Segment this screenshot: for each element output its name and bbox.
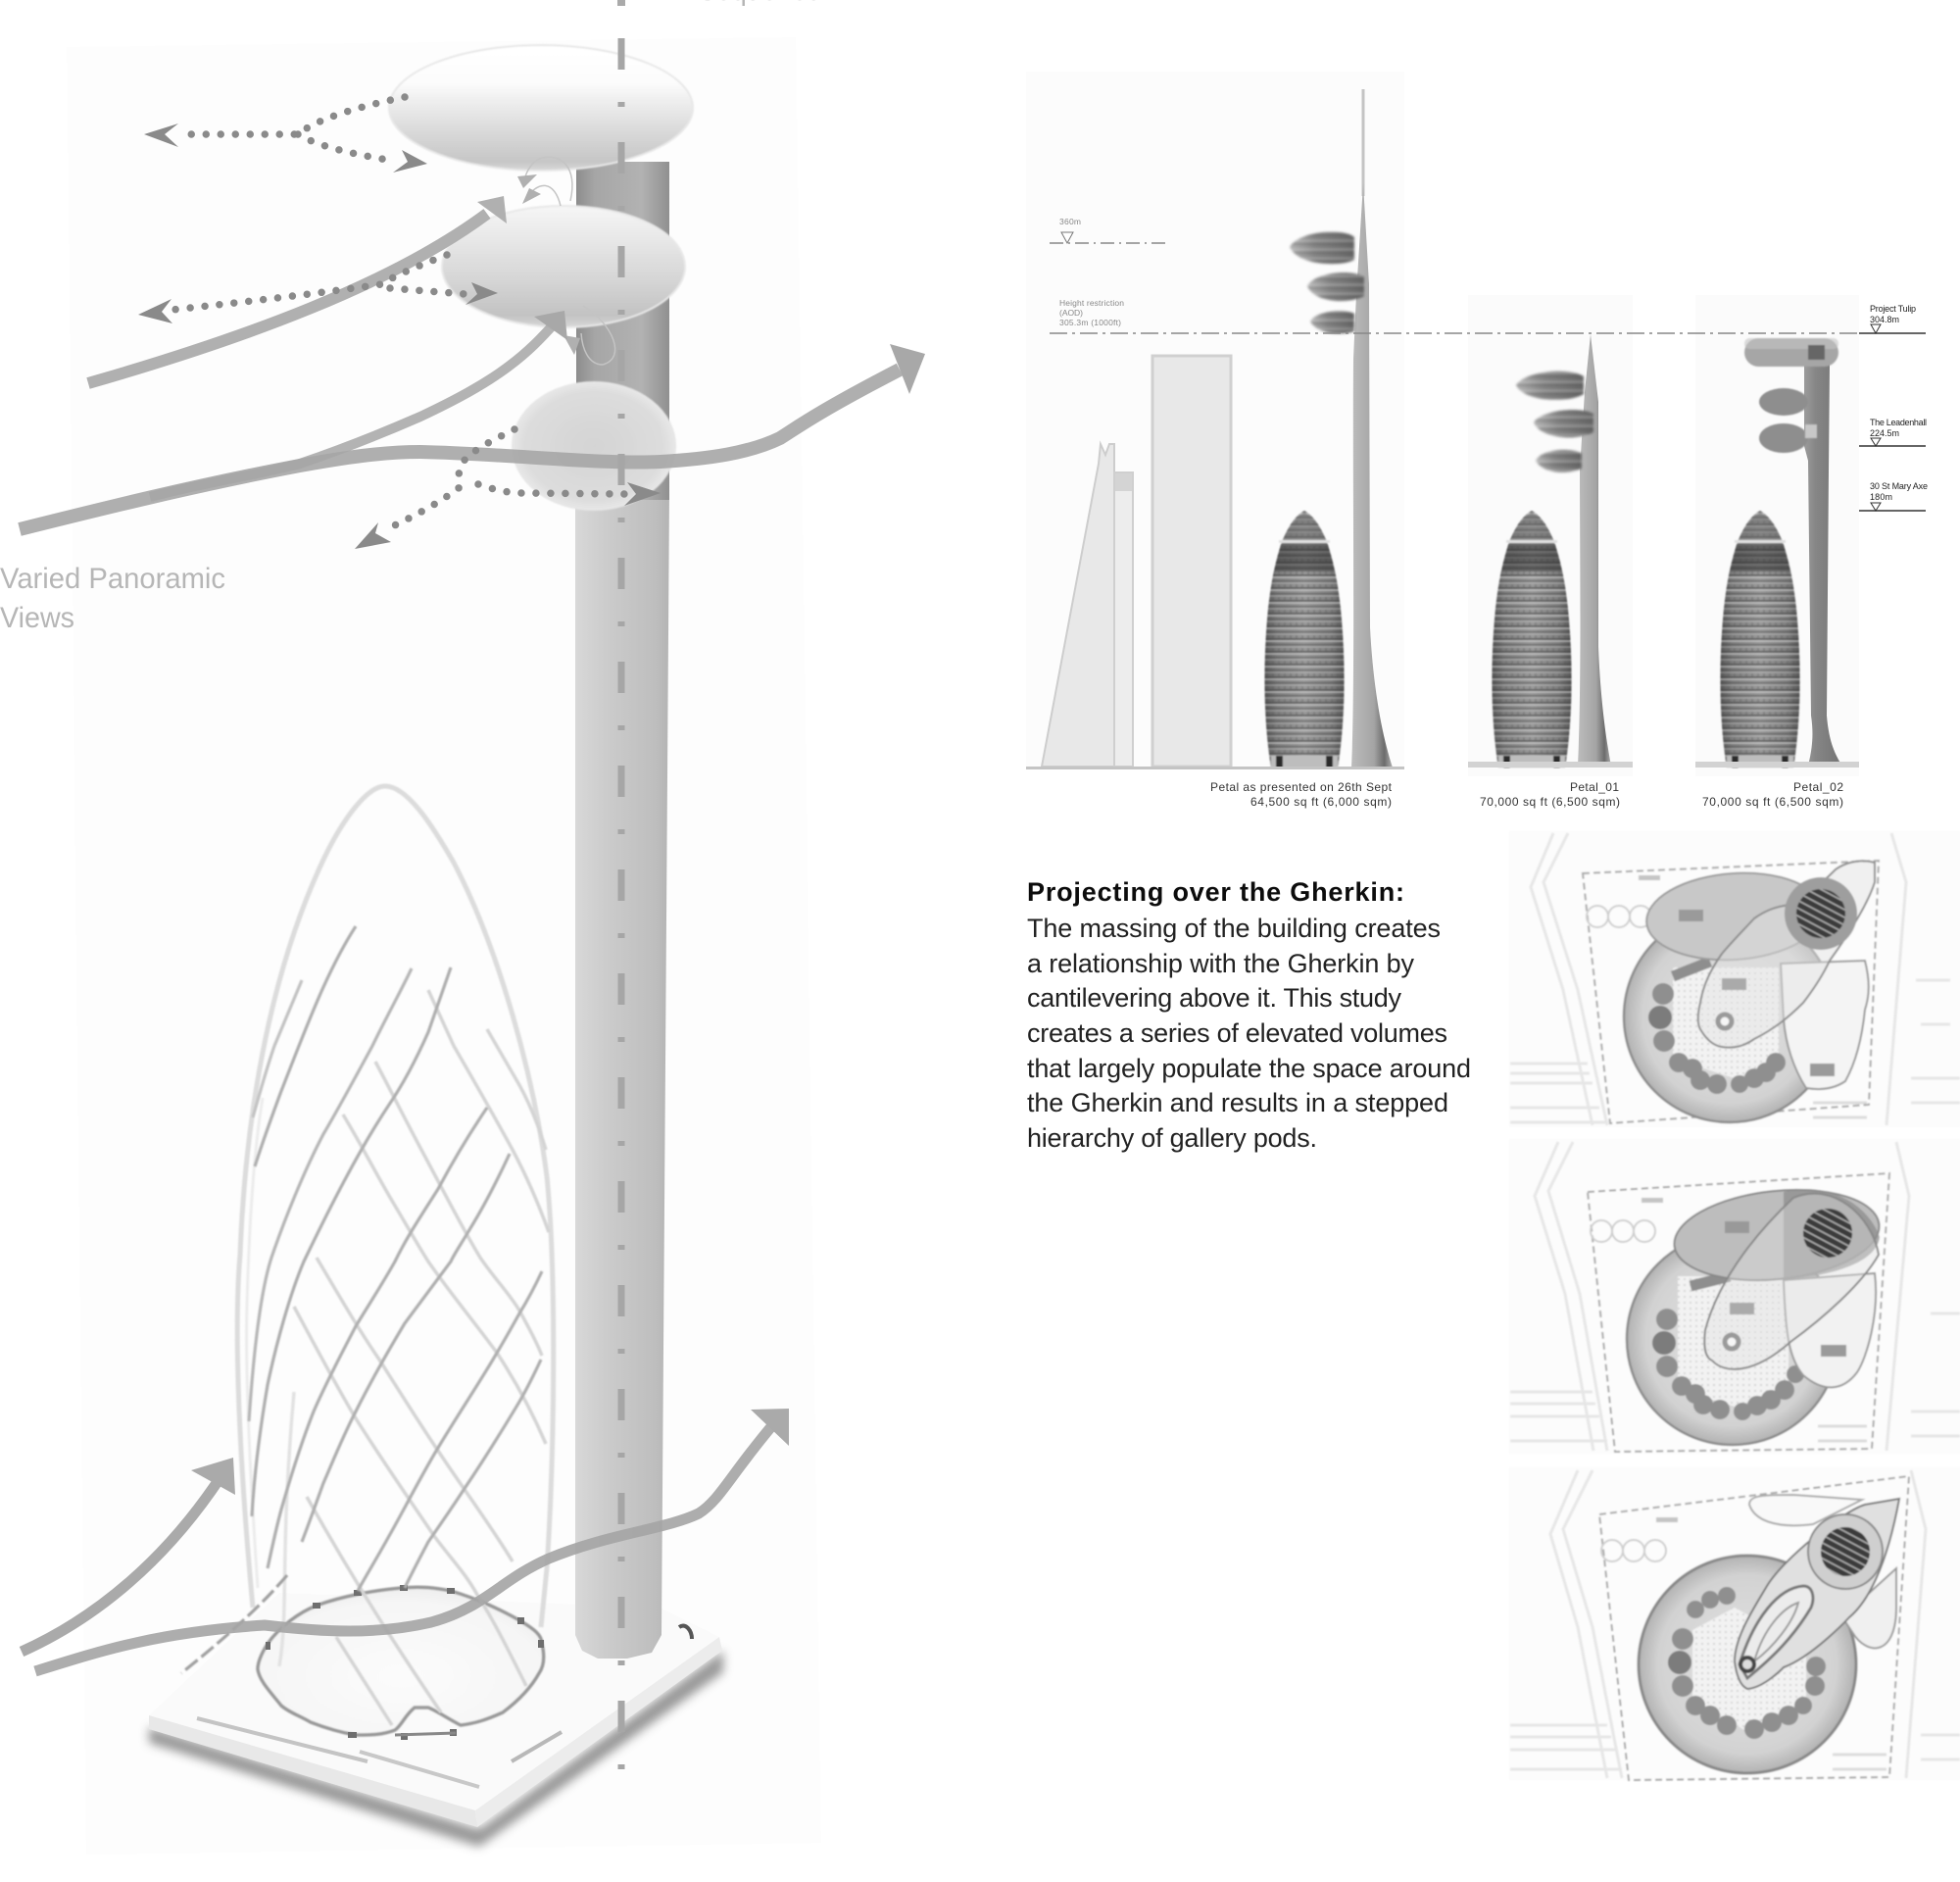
level marker: The Leadenhall: 224.5m [1870, 428, 1899, 438]
level marker: The Leadenhall [1859, 418, 1927, 446]
level marker: Project Tulip [1859, 304, 1926, 333]
dome at gherkin base [258, 1585, 544, 1740]
level marker: 30 St Mary Axe: 180m [1870, 492, 1892, 502]
ground line [1026, 767, 1404, 769]
level marker: 30 St Mary Axe: 30 St Mary Axe [1870, 481, 1928, 491]
caption [1480, 780, 1620, 809]
height datum: restriction 305.3m: (AOD) [1059, 308, 1083, 318]
building: block silhouette [1152, 356, 1231, 767]
caption: Petal as presented on 26th Sept [1210, 780, 1393, 794]
tower elevation with pods [1516, 334, 1611, 766]
small swirl arrows between pods [517, 157, 615, 365]
height datum: restriction 305.3m: 305.3m (1000ft) [1059, 318, 1121, 327]
height datum: restriction 305.3m [1050, 298, 1859, 333]
tower: main shaft [575, 162, 669, 1659]
level marker: Project Tulip: Project Tulip [1870, 304, 1916, 314]
base slab with shadow [149, 1593, 723, 1847]
caption: 64,500 sq ft (6,000 sqm) [1250, 795, 1392, 809]
dotted view arrows: top pod [144, 97, 427, 173]
height datum: restriction 305.3m: Height restriction [1059, 298, 1124, 308]
tower elevation with pods [1290, 89, 1393, 768]
caption: varied panoramic views: Views [0, 602, 74, 634]
building: gherkin elevation [1264, 511, 1345, 768]
text block: projecting over the gherkin [1027, 877, 1471, 1153]
dotted view arrows: middle pod [138, 255, 498, 323]
height datum: 360m [1050, 217, 1166, 243]
body copy [1027, 914, 1471, 1153]
building: gherkin elevation [1720, 511, 1800, 768]
body copy: the Gherkin and results in a stepped [1027, 1088, 1448, 1117]
tower centre line [617, 0, 625, 1770]
ground band [1468, 762, 1633, 768]
site plan 3 [1509, 1467, 1960, 1780]
arrow: ground wind to gherkin [22, 1458, 235, 1652]
ground band [1695, 762, 1859, 768]
height datum: 360m: 360m [1059, 217, 1081, 226]
panel: axonometric massing diagram backdrop [67, 37, 821, 1855]
level marker: 30 St Mary Axe [1859, 481, 1928, 511]
building: gherkin elevation [1492, 511, 1572, 768]
body copy: creates a series of elevated volumes [1027, 1018, 1447, 1048]
dome node dots [266, 1585, 544, 1740]
level marker: The Leadenhall: The Leadenhall [1870, 418, 1927, 427]
arrow: ground wind past tower [35, 1409, 789, 1671]
heading: Projecting over the Gherkin: [1027, 877, 1404, 907]
dotted view arrows: lower pod [355, 429, 661, 549]
arrow: wind flow under middle pod [150, 311, 567, 497]
site plan 2 [1509, 1139, 1960, 1454]
caption [1210, 780, 1393, 809]
body copy: The massing of the building creates [1027, 914, 1441, 943]
caption: varied panoramic views [0, 563, 225, 634]
body copy: a relationship with the Gherkin by [1027, 949, 1415, 978]
arrow: wind flow through lower pod [20, 344, 925, 529]
caption: 70,000 sq ft (6,500 sqm) [1702, 795, 1843, 809]
caption: Petal_02 [1793, 780, 1843, 794]
tower: gallery pods [389, 45, 693, 510]
panel: elevation, petal 02 [1695, 295, 1859, 809]
caption [1702, 780, 1843, 809]
caption: 70,000 sq ft (6,500 sqm) [1480, 795, 1620, 809]
body copy: that largely populate the space around [1027, 1054, 1471, 1083]
panel: elevation, petal as presented [1026, 72, 1404, 809]
panel: elevation, petal 01 [1468, 295, 1633, 809]
body copy: hierarchy of gallery pods. [1027, 1123, 1317, 1153]
level marker: Project Tulip: 304.8m [1870, 315, 1899, 324]
arrow: wind flow to middle pod [88, 196, 507, 383]
body copy: cantilevering above it. This study [1027, 983, 1401, 1013]
site plan 1 [1509, 831, 1960, 1127]
gherkin wireframe [181, 786, 554, 1725]
caption: varied panoramic views: Varied Panoramic [0, 563, 225, 595]
building: shard silhouette [1042, 444, 1133, 767]
caption: Petal_01 [1570, 780, 1619, 794]
tower elevation with pods [1744, 338, 1842, 766]
